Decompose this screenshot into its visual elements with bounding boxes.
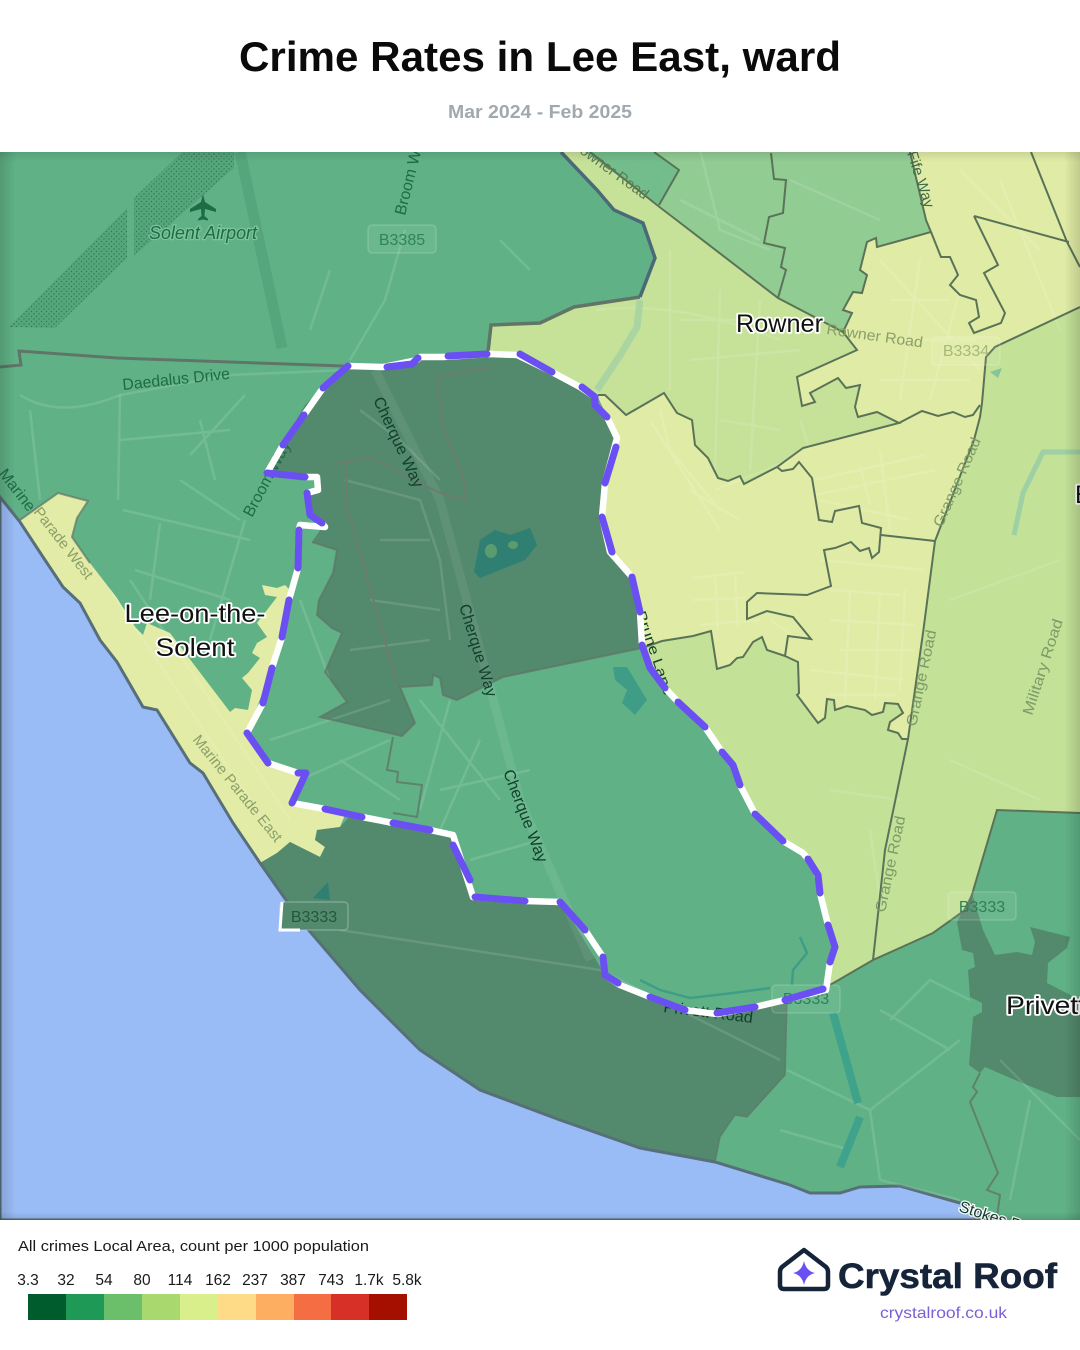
south-east green area bbox=[832, 811, 1080, 999]
water features bbox=[313, 300, 1080, 1167]
legend values: 162 bbox=[205, 1272, 231, 1289]
road labels: Rowner Road bbox=[825, 321, 924, 351]
yellow-green southern zone bbox=[642, 631, 908, 985]
road labels: Broom Way bbox=[241, 439, 294, 520]
place labels bbox=[124, 310, 1080, 1020]
legend values: 1.7k bbox=[354, 1272, 384, 1289]
legend colour scale bbox=[28, 1294, 407, 1320]
road shields: B3333 bbox=[783, 991, 829, 1008]
road labels: Marine Parade East bbox=[189, 732, 286, 846]
road labels: Daedalus Drive bbox=[122, 366, 231, 394]
road labels: Cherque Way bbox=[499, 767, 550, 865]
base green area bbox=[0, 152, 787, 1160]
yellow coastal strip bbox=[20, 493, 345, 863]
legend values: 743 bbox=[318, 1272, 344, 1289]
road labels: Grange Road bbox=[903, 628, 940, 728]
wordmark: Crystal Roof bbox=[838, 1257, 1057, 1296]
sea bbox=[0, 497, 1000, 1220]
icon: airport plane bbox=[190, 194, 216, 220]
pond bbox=[474, 528, 537, 578]
dark green northern ward area bbox=[265, 354, 642, 736]
road shields: B3333 bbox=[291, 909, 337, 926]
road labels: Rowner Road bbox=[568, 135, 652, 203]
legend values: 54 bbox=[95, 1272, 113, 1289]
road labels: Cherque Way bbox=[369, 395, 426, 491]
legend values: 32 bbox=[57, 1272, 75, 1289]
dark green Privett area bbox=[957, 893, 1080, 1097]
road labels: Privett Road bbox=[663, 999, 754, 1027]
road shields: B3334 bbox=[943, 343, 989, 360]
title: Crime Rates in Lee East, ward bbox=[239, 33, 841, 80]
road labels: Brune Lane bbox=[633, 609, 677, 697]
medium green northern zones bbox=[654, 152, 931, 332]
road labels: Cherque Way bbox=[455, 602, 499, 699]
legend title: All crimes Local Area, count per 1000 population bbox=[18, 1238, 369, 1255]
yellow-green Rowner zone bbox=[488, 152, 899, 484]
road labels: Fife Way bbox=[903, 149, 938, 210]
road labels: Military Road bbox=[1020, 617, 1067, 717]
legend bbox=[17, 1238, 422, 1320]
place labels: Solent bbox=[156, 634, 235, 662]
logo: Crystal Roof bbox=[780, 1250, 1057, 1322]
zone boundary lines bbox=[0, 152, 1000, 1217]
subtitle: date range: Mar 2024 - Feb 2025 bbox=[448, 102, 632, 122]
road labels: Grange Road bbox=[872, 814, 909, 914]
dark green southern coastal area bbox=[260, 816, 787, 1162]
place labels: Privett bbox=[1006, 992, 1080, 1020]
legend values: 387 bbox=[280, 1272, 306, 1289]
southern ward area bbox=[256, 398, 832, 978]
road labels: Broom W bbox=[392, 147, 425, 217]
legend values bbox=[17, 1272, 422, 1289]
legend values: 5.8k bbox=[392, 1272, 422, 1289]
website: crystalroof.co.uk bbox=[880, 1305, 1008, 1322]
legend values: 114 bbox=[168, 1272, 193, 1289]
road labels: Parade West bbox=[30, 504, 97, 583]
airport hatched areas bbox=[9, 152, 282, 348]
ward boundary: Lee East bbox=[247, 354, 835, 1014]
road shields: B3385 bbox=[379, 232, 425, 249]
legend values: 237 bbox=[242, 1272, 268, 1289]
road labels: Grange Road bbox=[930, 435, 985, 530]
label: Solent Airport: Solent Airport bbox=[149, 223, 258, 243]
legend values: 80 bbox=[133, 1272, 151, 1289]
road labels: Stokes Road bbox=[957, 1199, 1049, 1243]
light yellow north-east area bbox=[598, 152, 1080, 738]
map edge shading bbox=[0, 152, 1080, 1220]
place labels: Lee-on-the- bbox=[124, 600, 266, 628]
thin ward boundary lines east bbox=[590, 152, 1080, 985]
road shields: B3333 bbox=[959, 899, 1005, 916]
darker green northern sliver bbox=[585, 152, 679, 205]
yellow-green eastern zone bbox=[873, 307, 1080, 960]
road network bbox=[20, 150, 1080, 1200]
road shields bbox=[280, 225, 1016, 1013]
place labels: Rowner bbox=[736, 310, 823, 338]
legend values: 3.3 bbox=[17, 1272, 39, 1289]
icon: house with star bbox=[780, 1250, 828, 1289]
